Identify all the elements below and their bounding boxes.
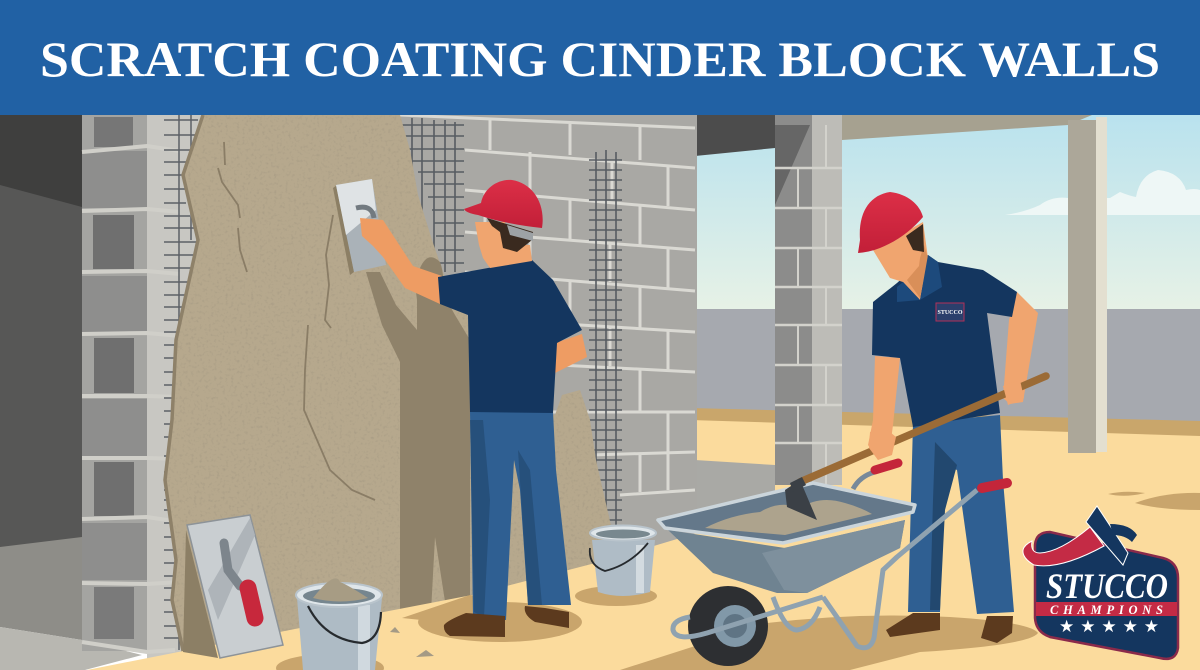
stucco champions logo bbox=[1023, 506, 1178, 659]
shirt logo bbox=[936, 303, 964, 321]
concrete post bbox=[1068, 117, 1107, 453]
bucket with mortar bbox=[296, 578, 382, 670]
title: SCRATCH COATING CINDER BLOCK WALLS bbox=[40, 31, 1160, 87]
shovel handle bbox=[800, 376, 1046, 482]
block column bbox=[82, 115, 180, 652]
mortar crumbs bbox=[390, 627, 434, 657]
wheelbarrow inner and rim bbox=[658, 483, 915, 543]
wheelbarrow wheel bbox=[688, 586, 768, 666]
logo stars: ★★★★★ bbox=[1059, 617, 1159, 637]
small bucket bbox=[590, 526, 656, 596]
worker 1 boots bbox=[444, 606, 569, 637]
shaded wall base between wall and pillar bbox=[695, 460, 775, 540]
worker 2 head and neck bbox=[873, 222, 928, 300]
badge bbox=[1035, 532, 1178, 659]
worker 2 hands bbox=[869, 380, 1024, 460]
logo trowel bbox=[1086, 506, 1137, 565]
wall backing behind column bbox=[147, 115, 407, 660]
cinder block wall bbox=[400, 115, 697, 620]
shirt logo: STUCCO bbox=[937, 310, 963, 316]
worker 2 hard hat bbox=[858, 192, 923, 253]
worker 1 pants bbox=[470, 412, 571, 620]
worker 1 helmet band bbox=[507, 225, 533, 241]
rear grip bbox=[875, 463, 898, 470]
cloud bbox=[1005, 170, 1200, 215]
worker 2 left arm bbox=[868, 356, 900, 460]
block pillar bbox=[775, 115, 842, 485]
wheelbarrow rear handle bbox=[853, 472, 875, 489]
worker 1 raised arm bbox=[360, 218, 442, 304]
worker shadow on stucco bbox=[366, 257, 470, 618]
title banner bbox=[0, 0, 1200, 115]
shovel blade bbox=[785, 480, 817, 520]
worker 2 pants bbox=[908, 415, 1014, 614]
worker 1: plastering bbox=[360, 180, 587, 637]
red band bbox=[1036, 602, 1177, 616]
wheelbarrow bbox=[658, 463, 1007, 666]
trowel on wall bbox=[333, 179, 386, 275]
shirt collar bbox=[897, 255, 942, 302]
wheelbarrow tray bbox=[668, 520, 905, 593]
worker 1 neck and head bbox=[475, 222, 532, 268]
worker 2: mixing bbox=[858, 192, 1038, 643]
scratch coat stucco bbox=[165, 115, 612, 670]
wall mesh right strip bbox=[589, 150, 622, 530]
shovel handle and gripping hands bbox=[790, 376, 1046, 492]
worker 1 hair bbox=[487, 218, 533, 252]
worker 2 hair bbox=[906, 224, 924, 252]
ceiling and concrete beam bbox=[695, 115, 1092, 156]
worker 1 hard hat bbox=[464, 180, 543, 228]
worker 1 shirt bbox=[438, 260, 582, 413]
worker 2 shirt bbox=[872, 255, 1017, 427]
shovel collar bbox=[790, 477, 806, 492]
worker 1 pants shading bbox=[470, 420, 542, 617]
red swoosh bbox=[1023, 527, 1104, 566]
wall mesh upper bbox=[402, 118, 464, 272]
worker 2 right arm bbox=[1003, 292, 1038, 404]
worker 2 neck shade bbox=[907, 245, 928, 298]
worker 2 pants shade bbox=[930, 442, 957, 610]
front grip bbox=[982, 483, 1007, 488]
worker 2 boots bbox=[886, 613, 1013, 643]
worker 1 forearm bbox=[553, 334, 587, 374]
wet mortar bbox=[705, 500, 872, 535]
logo subtitle: CHAMPIONS bbox=[1050, 603, 1163, 617]
wheelbarrow frame bbox=[673, 490, 977, 648]
trowel board leaning on wall bbox=[183, 515, 283, 658]
sand shadows bbox=[276, 492, 1200, 670]
foreground sand floor bbox=[87, 510, 775, 670]
column mesh bbox=[164, 115, 198, 650]
dark room interior bbox=[0, 115, 142, 670]
background: sky, far wall and sand bbox=[690, 115, 1200, 670]
logo wordmark: STUCCO bbox=[1046, 566, 1168, 606]
